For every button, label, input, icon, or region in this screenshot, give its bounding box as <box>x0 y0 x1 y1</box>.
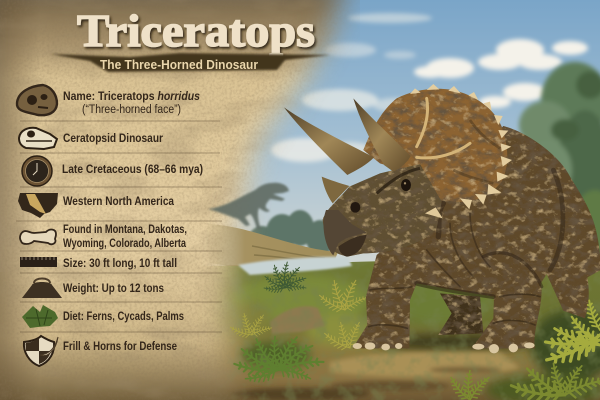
ground <box>0 255 600 400</box>
foreground ferns <box>233 299 600 400</box>
background ferns <box>229 262 369 353</box>
fact: period <box>22 156 203 186</box>
fact: fossil sites <box>20 224 187 250</box>
fact: name: (“Three-horned face”) <box>82 104 181 116</box>
frill ridges <box>417 98 470 158</box>
fact list <box>16 85 222 366</box>
icon: dinosaur skull <box>19 128 57 149</box>
fact: defense <box>24 336 177 366</box>
beak <box>324 210 367 255</box>
frill <box>363 84 512 209</box>
cheek horn <box>425 207 443 218</box>
fact: group <box>19 128 163 149</box>
fern: right <box>543 299 600 371</box>
body <box>353 126 600 348</box>
fact: name <box>17 85 200 116</box>
fallen log <box>270 306 325 334</box>
fact: weight: Weight: Up to 12 tons <box>63 283 164 295</box>
brush stroke <box>50 53 330 72</box>
icon: leaves <box>22 305 58 328</box>
distant hills and river <box>205 224 352 275</box>
fact: region: Western North America <box>63 196 175 208</box>
far front leg <box>438 293 483 335</box>
frill spikes <box>410 84 512 209</box>
background trees <box>248 62 600 290</box>
foliage masses <box>228 274 600 400</box>
foliage mottling <box>215 262 600 400</box>
fern: bottom right <box>446 362 600 400</box>
nose horn <box>322 177 349 203</box>
subtitle banner <box>50 53 330 72</box>
fact: fossil sites: Wyoming, Colorado, Alberta <box>63 238 186 250</box>
icon: ruler <box>20 257 57 267</box>
fact: fossil sites: Found in Montana, Dakotas, <box>63 224 187 236</box>
nostril <box>350 202 360 213</box>
earth path <box>230 352 520 400</box>
fern: lower middle <box>233 333 325 386</box>
icon: fossil skull <box>17 85 57 115</box>
fact: diet: Diet: Ferns, Cycads, Palms <box>63 311 184 323</box>
title: Triceratops <box>77 5 315 56</box>
brow horn left <box>284 107 374 175</box>
icon: clock <box>22 156 52 186</box>
fact: diet <box>22 305 184 328</box>
clouds <box>271 13 588 162</box>
toes <box>353 342 535 353</box>
body shading <box>369 170 563 328</box>
parchment panel <box>0 0 360 400</box>
fact: weight <box>22 278 164 298</box>
fact: group: Ceratopsid Dinosaur <box>63 133 163 145</box>
brow <box>377 168 420 193</box>
icon: weight <box>22 278 62 298</box>
fact: name: Name: Triceratops horridus <box>63 91 200 103</box>
eye <box>401 179 411 191</box>
fact: size <box>20 257 177 270</box>
distant tyrannosaur <box>208 183 289 229</box>
fact: defense: Frill & Horns for Defense <box>63 341 177 353</box>
fact: period: Late Cretaceous (68–66 mya) <box>62 164 203 176</box>
icon: map of North America <box>18 193 58 218</box>
icon: shield and horn <box>24 336 58 366</box>
head <box>323 164 442 257</box>
subtitle banner: The Three-Horned Dinosaur <box>100 57 258 72</box>
fact: region <box>18 193 175 218</box>
brow horn right <box>353 98 411 172</box>
icon: bone <box>20 230 56 244</box>
triceratops illustration <box>284 84 600 353</box>
fact: size: Size: 30 ft long, 10 ft tall <box>63 258 177 270</box>
